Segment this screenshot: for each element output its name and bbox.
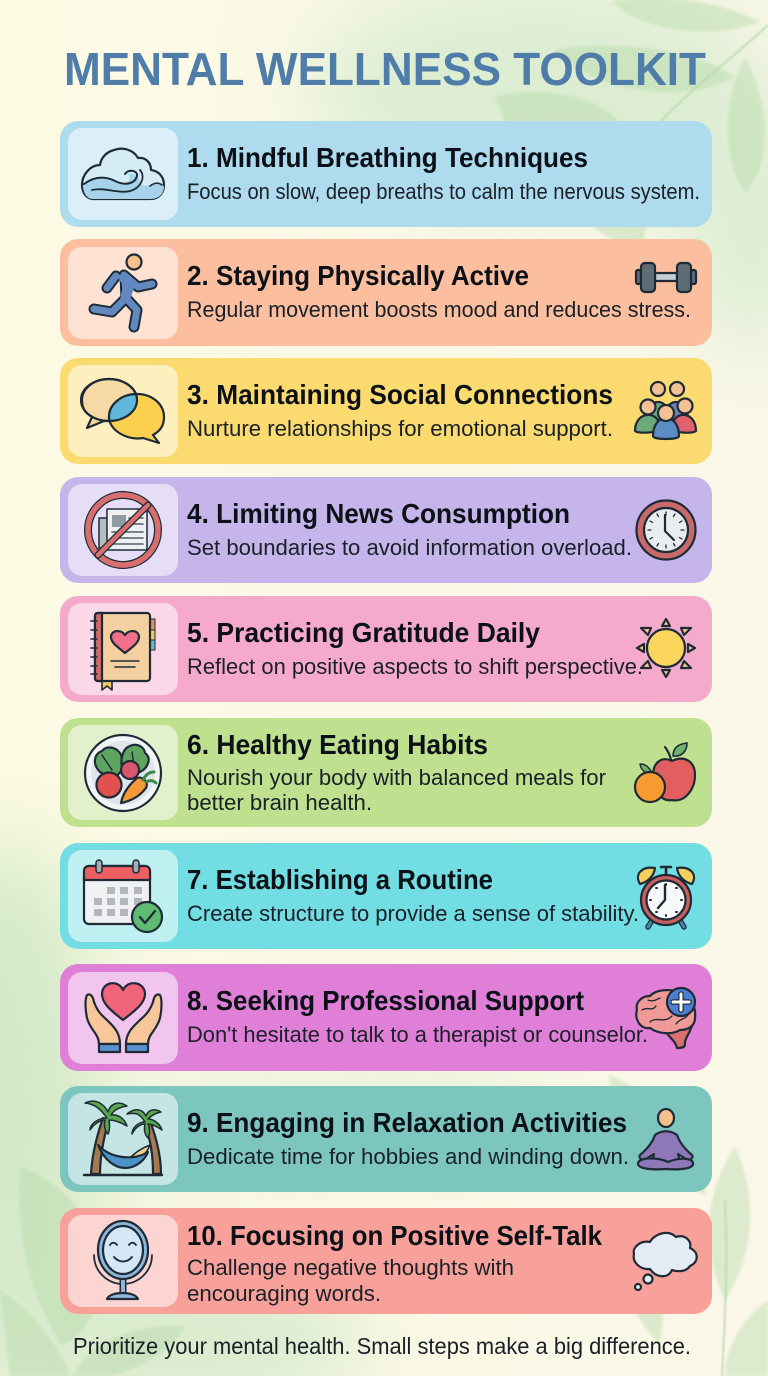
icon: apple and orange <box>635 743 695 802</box>
icon: no newspaper <box>88 495 158 565</box>
heading: 8. Seeking Professional Support <box>187 985 584 1016</box>
heading: 9. Engaging in Relaxation Activities <box>187 1107 627 1138</box>
heading: 1. Mindful Breathing Techniques <box>187 142 588 173</box>
panel: 9 relaxation <box>60 1086 712 1192</box>
description: Create structure to provide a sense of stability. <box>187 901 639 926</box>
icon: meditating person <box>638 1109 693 1169</box>
description: Regular movement boosts mood and reduces stress. <box>187 297 691 322</box>
icon: alarm clock <box>638 867 694 927</box>
icon: wall clock <box>636 500 696 560</box>
icon: runner <box>94 254 152 327</box>
panel: 6 healthy eating <box>60 718 712 827</box>
icon: smiling mirror <box>94 1221 152 1299</box>
description: Focus on slow, deep breaths to calm the nervous system. <box>187 179 700 204</box>
icon: speech bubbles <box>81 379 165 443</box>
description line 2: encouraging words. <box>187 1281 381 1306</box>
description: Challenge negative thoughts with <box>187 1255 514 1280</box>
description: Nourish your body with balanced meals for <box>187 765 606 790</box>
panel: 7 routine <box>60 843 712 949</box>
icon: hands holding heart <box>86 983 162 1052</box>
description line 2: better brain health. <box>187 790 372 815</box>
description: Nurture relationships for emotional support. <box>187 416 613 441</box>
icon: brain with plus <box>636 988 695 1048</box>
footer text: Prioritize your mental health. Small steps make a big difference. <box>73 1333 691 1359</box>
heading: 2. Staying Physically Active <box>187 260 529 291</box>
description: Set boundaries to avoid information overload. <box>187 535 632 560</box>
panel: 8 professional support <box>60 964 712 1071</box>
icon: thought bubble <box>634 1233 697 1290</box>
title: MENTAL WELLNESS TOOLKIT <box>64 43 706 95</box>
icon: calendar with check <box>84 860 162 932</box>
heading: 6. Healthy Eating Habits <box>187 729 488 760</box>
panel: 1 mindful breathing <box>60 121 712 227</box>
panel: 10 self talk <box>60 1208 712 1314</box>
description: Dedicate time for hobbies and winding down. <box>187 1144 629 1169</box>
heading: 5. Practicing Gratitude Daily <box>187 617 541 648</box>
icon: journal <box>91 613 155 690</box>
icon: sun <box>637 619 695 677</box>
panel: 3 social connections <box>60 358 712 464</box>
panel: 2 physically active <box>60 239 712 346</box>
icon: cloud with wave <box>82 149 164 199</box>
description: Reflect on positive aspects to shift perspective. <box>187 654 643 679</box>
panel: 5 gratitude <box>60 596 712 702</box>
heading: 3. Maintaining Social Connections <box>187 379 613 410</box>
description: Don't hesitate to talk to a therapist or counselor. <box>187 1022 648 1047</box>
heading: 4. Limiting News Consumption <box>187 498 570 529</box>
icon: group of people <box>635 382 696 439</box>
icon: plate of vegetables <box>85 735 161 811</box>
icon: dumbbell <box>636 263 696 292</box>
heading: 10. Focusing on Positive Self-Talk <box>187 1220 603 1251</box>
heading: 7. Establishing a Routine <box>187 864 493 895</box>
icon: palm trees and hammock <box>84 1101 162 1175</box>
panel: 4 limiting news <box>60 477 712 583</box>
